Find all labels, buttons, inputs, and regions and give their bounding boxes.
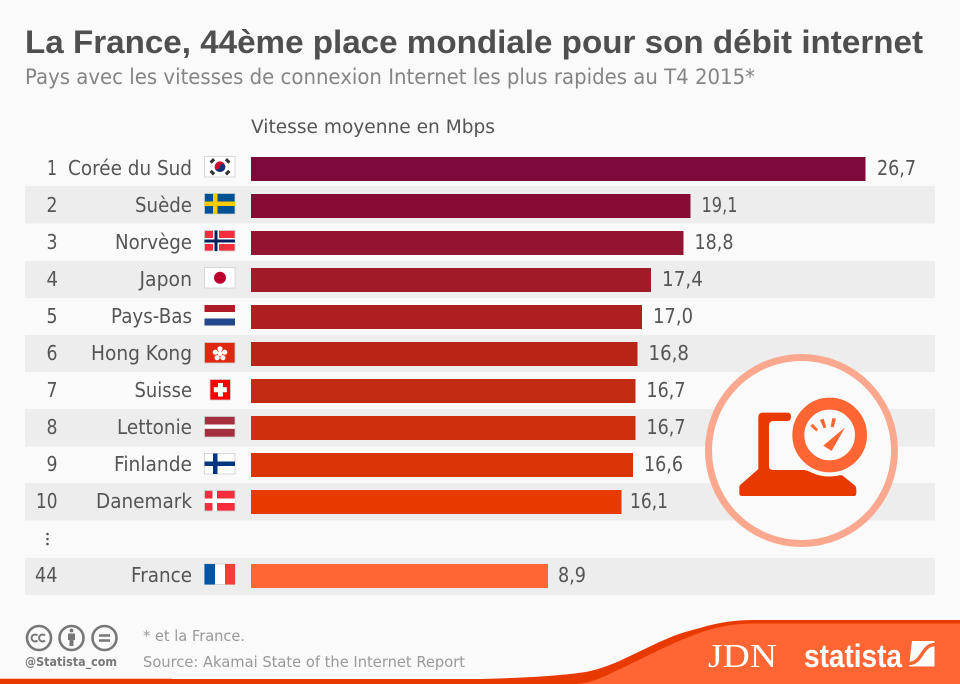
footer wave bbox=[0, 620, 960, 684]
country: Pays-Bas bbox=[111, 304, 192, 328]
rank: 1 bbox=[47, 156, 57, 180]
stripe bbox=[25, 409, 935, 446]
bar bbox=[251, 379, 636, 403]
statista mark bbox=[908, 641, 935, 666]
source: Source: Akamai State of the Internet Report bbox=[143, 653, 465, 671]
rank: 3 bbox=[46, 230, 58, 254]
stripe bbox=[25, 335, 935, 372]
stripe bbox=[25, 186, 935, 224]
row 4: Japon bbox=[25, 261, 935, 298]
value: 16,6 bbox=[644, 452, 683, 476]
country: Suède bbox=[135, 193, 192, 217]
statista handle: @Statista_com bbox=[25, 655, 117, 670]
flag: Denmark bbox=[204, 490, 235, 511]
flag: South Korea bbox=[204, 156, 235, 177]
rank: 6 bbox=[46, 341, 58, 365]
row 9: Finlande bbox=[46, 452, 683, 477]
bar bbox=[251, 157, 866, 181]
value: 16,8 bbox=[648, 341, 689, 365]
value: 16,7 bbox=[646, 378, 686, 402]
value: 16,7 bbox=[646, 415, 686, 439]
JDN logo: JDN bbox=[708, 638, 777, 675]
axis heading: Vitesse moyenne en Mbps bbox=[251, 117, 495, 138]
stripe bbox=[25, 261, 935, 298]
country: Suisse bbox=[134, 378, 192, 402]
row 3: Norvège bbox=[46, 230, 734, 255]
row 10: Danemark bbox=[25, 483, 935, 520]
bar bbox=[251, 231, 684, 255]
country: Finlande bbox=[114, 452, 192, 476]
flag: Japan bbox=[204, 268, 235, 288]
country: Japon bbox=[138, 267, 192, 291]
flag: Sweden bbox=[204, 194, 235, 214]
flag: Switzerland bbox=[210, 380, 230, 400]
rank: 4 bbox=[46, 267, 58, 291]
row 2: Suède bbox=[25, 186, 935, 224]
subtitle: Pays avec les vitesses de connexion Internet les plus rapides au T4 2015* bbox=[25, 65, 755, 90]
statista logo: statista bbox=[804, 638, 902, 674]
footnote: * et la France. bbox=[143, 627, 245, 645]
country: Corée du Sud bbox=[68, 156, 192, 180]
rank: 5 bbox=[46, 304, 58, 328]
bar bbox=[251, 490, 622, 514]
value: 17,4 bbox=[662, 267, 703, 291]
row 7: Suisse bbox=[46, 378, 686, 403]
title: La France, 44ème place mondiale pour son débit internet bbox=[25, 24, 923, 60]
ellipsis marker bbox=[46, 533, 49, 545]
rank: 9 bbox=[46, 452, 58, 476]
rank: 44 bbox=[35, 563, 58, 587]
icon: laptop with speedometer in a ring bbox=[708, 358, 894, 544]
flag: France bbox=[204, 564, 235, 584]
flag: Netherlands bbox=[204, 305, 235, 326]
row 5: Pays-Bas bbox=[46, 304, 693, 329]
flag: Latvia bbox=[204, 416, 235, 437]
rank: 2 bbox=[46, 193, 58, 217]
value: 19,1 bbox=[702, 193, 738, 217]
row 8: Lettonie bbox=[25, 409, 935, 446]
bar bbox=[251, 268, 651, 292]
country: Hong Kong bbox=[91, 341, 192, 365]
bar bbox=[251, 416, 636, 440]
row 6: Hong Kong bbox=[25, 335, 935, 372]
value: 26,7 bbox=[877, 156, 916, 180]
bar bbox=[251, 305, 642, 329]
rank: 10 bbox=[36, 489, 58, 513]
country: Danemark bbox=[96, 489, 192, 513]
flag: Hong Kong bbox=[204, 342, 235, 363]
laptop bbox=[739, 413, 856, 496]
country: Lettonie bbox=[117, 415, 192, 439]
value: 16,1 bbox=[630, 489, 668, 513]
rank: 7 bbox=[46, 378, 58, 402]
value: 8,9 bbox=[558, 563, 586, 587]
creative commons icons bbox=[27, 626, 116, 650]
value: 18,8 bbox=[694, 230, 734, 254]
rank: 8 bbox=[46, 415, 58, 439]
bar bbox=[251, 453, 633, 477]
bar bbox=[251, 342, 638, 366]
row 44: France bbox=[25, 558, 935, 595]
stripe bbox=[25, 558, 935, 595]
flag: Finland bbox=[204, 454, 235, 474]
row 1: Corée du Sud bbox=[47, 156, 916, 181]
flag: Norway bbox=[204, 230, 235, 251]
bar bbox=[251, 194, 690, 218]
stripe bbox=[25, 483, 935, 520]
value: 17,0 bbox=[653, 304, 693, 328]
country: France bbox=[131, 563, 192, 587]
country: Norvège bbox=[115, 230, 192, 254]
speedometer bbox=[798, 404, 861, 466]
bar bbox=[251, 564, 548, 588]
